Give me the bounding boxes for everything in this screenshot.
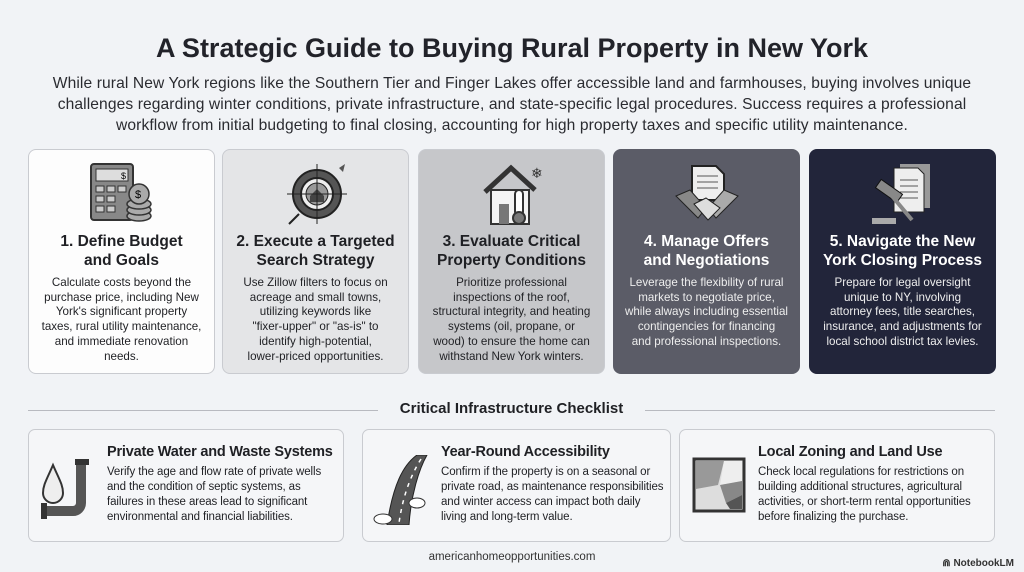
title: A Strategic Guide to Buying Rural Property in New York xyxy=(156,33,868,63)
subtitle xyxy=(52,75,971,134)
icon: house with thermometer: ❄ xyxy=(531,165,543,181)
icon: road xyxy=(374,455,428,525)
text xyxy=(433,276,590,363)
text: structural integrity, and heating xyxy=(433,305,590,318)
text: Check local regulations for restrictions on xyxy=(758,466,964,478)
text: withstand New York winters. xyxy=(439,350,584,363)
text: Confirm if the property is on a seasonal or xyxy=(441,466,650,478)
text: Leverage the flexibility of rural xyxy=(629,276,784,289)
section heading: checklist: Critical Infrastructure Checklist xyxy=(400,400,623,417)
text: attorney fees, title searches, xyxy=(830,305,975,318)
subtitle: challenges regarding winter conditions, private infrastructure, and state-specific legal procedures. Success requires a professional xyxy=(58,96,966,113)
panel: step 4 xyxy=(613,149,800,374)
heading xyxy=(437,233,586,269)
text: York's significant property xyxy=(56,305,187,318)
text: Verify the age and flow rate of private wells xyxy=(107,466,321,478)
icon: drop and pipe xyxy=(41,459,89,519)
heading: 1. Define Budget xyxy=(60,233,183,250)
heading: Search Strategy xyxy=(256,252,375,269)
heading: 4. Manage Offers xyxy=(644,233,769,250)
text: private road, as maintenance responsibilities xyxy=(441,481,663,493)
text: living and long-term value. xyxy=(441,511,573,523)
text: and professional inspections. xyxy=(632,335,781,348)
text: and winter access can impact both daily xyxy=(441,496,640,508)
text: unique to NY, involving xyxy=(844,291,961,304)
icon: target with house xyxy=(287,164,347,225)
text xyxy=(42,276,201,363)
icon: calculator and coins: $ xyxy=(135,189,141,201)
heading xyxy=(236,233,395,269)
panel: step 2 xyxy=(222,149,409,374)
text: "fixer-upper" or "as-is" to xyxy=(252,320,378,333)
heading: York Closing Process xyxy=(823,252,982,269)
text: lower-priced opportunities. xyxy=(248,350,383,363)
heading: 5. Navigate the New xyxy=(830,233,975,250)
icon: calculator and coins: $ xyxy=(121,171,126,181)
text: markets to negotiate price, xyxy=(638,291,775,304)
heading: 2. Execute a Targeted xyxy=(236,233,395,250)
footer source: americanhomeopportunities.com xyxy=(429,551,595,563)
text xyxy=(107,466,321,523)
text: insurance, and adjustments for xyxy=(823,320,982,333)
text: activities, or short-term rental opportunities xyxy=(758,496,971,508)
text: and the condition of septic systems, as xyxy=(107,481,301,493)
text: wood) to ensure the home can xyxy=(433,335,590,348)
text: environmental and financial liabilities. xyxy=(107,511,293,523)
panel: accessibility xyxy=(362,429,671,542)
text: acreage and small towns, xyxy=(250,291,381,304)
subtitle: While rural New York regions like the Southern Tier and Finger Lakes offer accessible land and farmhouses, buying involves unique xyxy=(53,75,971,92)
text: while always including essential xyxy=(625,305,788,318)
heading: 3. Evaluate Critical xyxy=(443,233,580,250)
heading: Private Water and Waste Systems xyxy=(107,444,333,460)
heading: and Negotiations xyxy=(644,252,769,269)
heading: Property Conditions xyxy=(437,252,586,269)
subtitle: workflow from initial budgeting to final closing, accounting for high property taxes and specific utility maintenance. xyxy=(116,117,908,134)
heading: and Goals xyxy=(84,252,159,269)
text: Prioritize professional xyxy=(456,276,567,289)
heading: Year-Round Accessibility xyxy=(441,444,610,460)
logo: NotebookLM: ⋒ NotebookLM xyxy=(942,558,1014,569)
icon: zoning map xyxy=(692,458,746,512)
heading xyxy=(823,233,982,269)
text: utilizing keywords like xyxy=(260,305,371,318)
icon: handshake with document xyxy=(675,165,739,221)
heading xyxy=(60,233,183,269)
text xyxy=(625,276,788,348)
text xyxy=(441,466,664,523)
text: Calculate costs beyond the xyxy=(52,276,191,289)
heading: Local Zoning and Land Use xyxy=(758,444,942,460)
text: identify high-potential, xyxy=(259,335,372,348)
icon: gavel and documents xyxy=(872,164,930,224)
text: and immediate renovation xyxy=(55,335,188,348)
panel: step 5 xyxy=(809,149,996,374)
text: failures in these areas lead to significant xyxy=(107,496,307,508)
text xyxy=(758,466,971,523)
panel: step 1 xyxy=(28,149,215,374)
text: inspections of the roof, xyxy=(453,291,570,304)
text: purchase price, including New xyxy=(44,291,199,304)
icon: house with thermometer xyxy=(483,164,543,225)
text: systems (oil, propane, or xyxy=(448,320,575,333)
panel: water and waste xyxy=(28,429,344,542)
panel: zoning xyxy=(679,429,995,542)
icon: calculator and coins xyxy=(90,163,152,222)
text xyxy=(823,276,982,348)
text: taxes, rural utility maintenance, xyxy=(42,320,201,333)
text: local school district tax levies. xyxy=(826,335,979,348)
heading xyxy=(644,233,769,269)
text: before finalizing the purchase. xyxy=(758,511,908,523)
text: Use Zillow filters to focus on xyxy=(243,276,388,289)
text: Prepare for legal oversight xyxy=(834,276,970,289)
text: needs. xyxy=(104,350,139,363)
text xyxy=(243,276,388,363)
text: building additional structures, agricultural xyxy=(758,481,962,493)
panel: step 3 xyxy=(418,149,605,374)
text: contingencies for financing xyxy=(638,320,775,333)
